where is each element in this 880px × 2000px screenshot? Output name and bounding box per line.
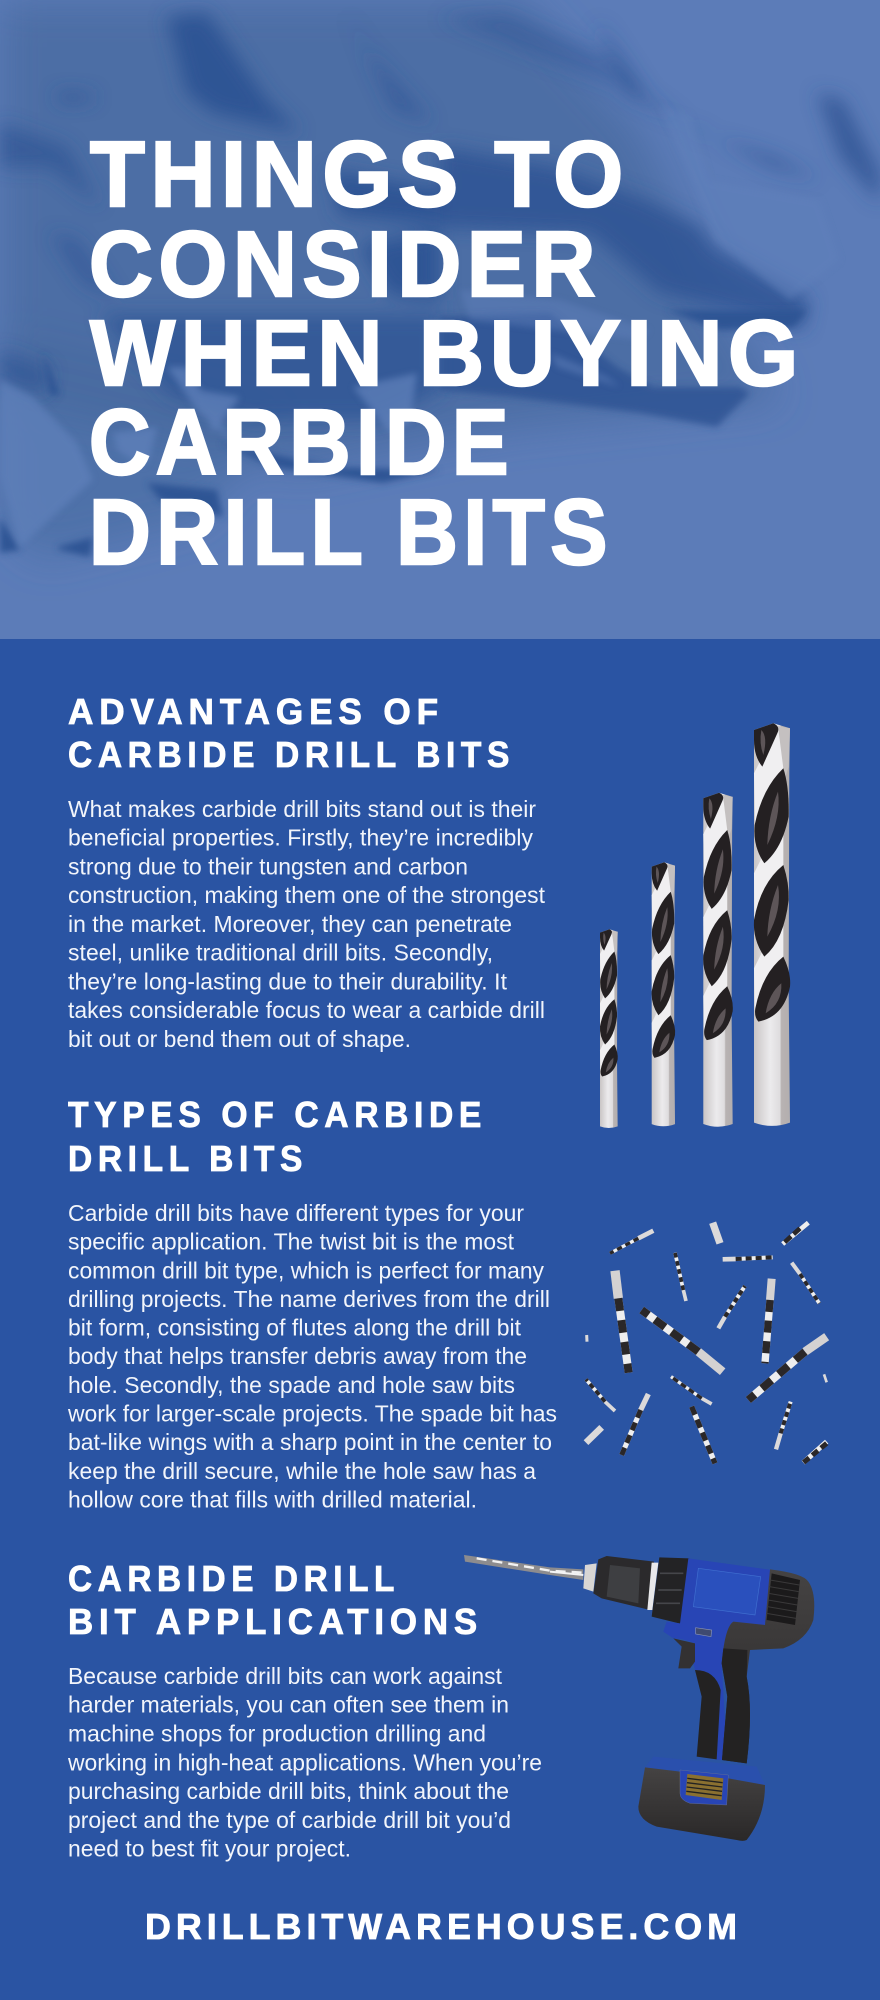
bit small — [600, 929, 618, 1128]
text block: advantages — [68, 796, 546, 1052]
text block: applications: project and the type of carbide drill bit you’d — [68, 1807, 511, 1833]
text block: types: hole. Secondly, the spade and hole saw bits — [68, 1372, 515, 1398]
drill body — [663, 1558, 772, 1760]
text block: types: bit form, consisting of flutes along the drill bit — [68, 1315, 522, 1341]
text block: types: specific application. The twist bit is the most — [68, 1229, 515, 1255]
text block: applications: purchasing carbide drill bits, think about the — [68, 1778, 509, 1804]
text block: applications — [67, 1663, 542, 1862]
icon: cordless drill — [464, 1555, 814, 1841]
text block: types: work for larger-scale projects. The spade bit has — [67, 1401, 557, 1427]
battery — [638, 1757, 765, 1841]
bit large — [703, 793, 733, 1127]
icon: scattered drill bits — [586, 1223, 827, 1463]
text block: types: bat-like wings with a sharp point in the center to — [68, 1429, 552, 1455]
text block: advantages: bit out or bend them out of shape. — [68, 1026, 411, 1052]
text block: advantages: What makes carbide drill bits stand out is their — [68, 796, 536, 822]
title: CONSIDER — [89, 212, 601, 316]
text block: advantages: steel, unlike traditional drill bits. Secondly, — [68, 940, 493, 966]
text block: applications: Because carbide drill bits can work against — [68, 1663, 503, 1689]
drill bit — [464, 1555, 583, 1580]
text block: types: body that helps transfer debris away from the — [68, 1343, 527, 1369]
text block: types: Carbide drill bits have different types for your — [68, 1200, 524, 1226]
text block: applications: machine shops for production drilling and — [68, 1720, 486, 1746]
heading: applications: CARBIDE DRILL — [68, 1558, 400, 1599]
text block: applications: need to best fit your project. — [68, 1836, 351, 1862]
title: WHEN BUYING — [90, 301, 804, 405]
bit medium — [652, 862, 675, 1126]
heading: types: DRILL BITS — [68, 1138, 308, 1179]
text block: applications: working in high-heat applications. When you’re — [67, 1749, 542, 1775]
text block: advantages: they’re long-lasting due to their durability. It — [68, 968, 508, 994]
text block: advantages: beneficial properties. Firstly, they’re incredibly — [68, 825, 534, 851]
text block: types: hollow core that fills with drilled material. — [68, 1486, 477, 1512]
title: DRILL BITS — [89, 480, 613, 584]
title: CARBIDE — [89, 390, 514, 494]
text block: types — [67, 1200, 557, 1512]
panel: header banner with blurred drill-bit photo — [0, 0, 880, 639]
chuck — [583, 1556, 689, 1624]
text block: advantages: strong due to their tungsten and carbon — [68, 854, 468, 880]
text block: advantages: construction, making them one of the strongest — [68, 882, 546, 908]
text block: types: drilling projects. The name derives from the drill — [68, 1286, 550, 1312]
heading: types — [68, 1094, 487, 1179]
heading: applications — [68, 1558, 483, 1642]
heading: applications: BIT APPLICATIONS — [68, 1601, 483, 1642]
text block: types: keep the drill secure, while the hole saw has a — [68, 1458, 536, 1484]
heading: advantages — [68, 691, 515, 775]
text block: advantages: in the market. Moreover, they can penetrate — [68, 911, 512, 937]
title: THINGS TO — [90, 122, 629, 226]
footer website URL: DRILLBITWAREHOUSE.COM — [145, 1906, 742, 1947]
bit largest — [754, 723, 790, 1126]
heading: advantages: ADVANTAGES OF — [68, 691, 444, 732]
title — [89, 122, 804, 584]
text block: types: common drill bit type, which is perfect for many — [68, 1257, 545, 1283]
heading: advantages: CARBIDE DRILL BITS — [68, 734, 515, 775]
text block: applications: harder materials, you can often see them in — [68, 1692, 509, 1718]
text block: advantages: takes considerable focus to wear a carbide drill — [68, 997, 545, 1023]
heading: types: TYPES OF CARBIDE — [68, 1094, 487, 1135]
rear housing and handle — [673, 1569, 814, 1763]
icon: four drill bits — [600, 723, 790, 1128]
